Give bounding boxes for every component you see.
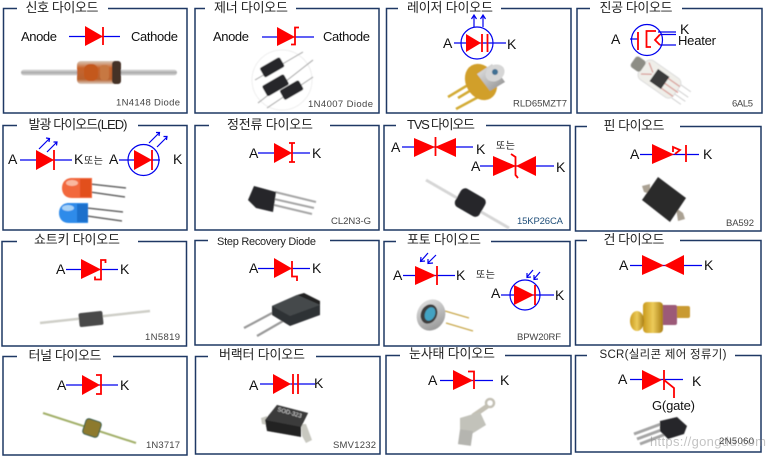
photo: TO-92 package: [248, 186, 316, 214]
heading: signal diode: 신호 다이오드: [26, 0, 99, 15]
photo: blue LED: [59, 203, 123, 223]
panel: TVS diode: [384, 117, 570, 230]
part number: 1N5819: [145, 332, 180, 343]
laser diode symbol: [454, 15, 506, 59]
panel: zener diode: [195, 0, 379, 113]
heading: LED: 발광 다이오드(LED): [28, 117, 128, 132]
photo: axial Schottky diode: [40, 311, 150, 327]
photo: SMD PIN diode: [642, 177, 686, 222]
heading: tunnel diode: 터널 다이오드: [28, 348, 102, 363]
heading: avalanche diode: 눈사태 다이오드: [409, 346, 495, 361]
current regulator symbol: [258, 143, 310, 163]
label: K: K: [556, 159, 566, 175]
label: K: K: [312, 260, 322, 276]
label: K: K: [500, 372, 510, 388]
label: K: K: [120, 261, 130, 277]
diode symbol: [69, 26, 120, 46]
vacuum tube symbol: [630, 24, 676, 56]
tunnel diode symbol: [66, 375, 118, 395]
part number: RLD65MZT7: [513, 98, 567, 110]
part number: 6AL5: [732, 98, 753, 110]
text: or: 또는: [84, 155, 103, 167]
panel: tunnel diode: [3, 348, 187, 455]
photo: stud-mount diode: [458, 399, 494, 446]
photodiode symbol in circle: [501, 270, 554, 310]
photo: axial TVS diode: [426, 180, 509, 228]
label: K: K: [173, 151, 183, 167]
photo: red LED: [62, 178, 126, 198]
label: A: A: [619, 257, 629, 273]
photo: SOD-323 package: SOD-323: [276, 407, 303, 420]
part number: CL2N3-G: [331, 216, 371, 227]
photo: laser diode can: [448, 58, 508, 109]
part number: 1N4148 Diode: [116, 98, 180, 108]
panel: PIN diode: [576, 118, 761, 231]
label: cathode: Cathode: [323, 29, 370, 44]
label: A: A: [56, 261, 66, 277]
label: A: A: [393, 267, 403, 283]
avalanche symbol: [440, 370, 493, 390]
part number: 2N5060: [719, 436, 754, 447]
part number: BA592: [726, 218, 754, 229]
photo: power package: [244, 293, 320, 336]
text: or: 또는: [476, 269, 495, 281]
label: A: A: [109, 151, 119, 167]
label: A: A: [249, 260, 259, 276]
label: K: K: [476, 141, 486, 157]
panel: signal diode: [4, 0, 187, 113]
heading: constant current diode: 정전류 다이오드: [227, 117, 313, 132]
label: A: A: [491, 285, 501, 301]
panel: step recovery diode: [195, 236, 379, 345]
bidirectional TVS symbol: [402, 137, 473, 157]
photo: vacuum tube: [627, 51, 694, 108]
SCR symbol: [630, 370, 683, 398]
label: anode: Anode: [213, 29, 249, 44]
label: A: A: [428, 372, 438, 388]
photo: SCR TO-92: [634, 417, 687, 444]
label: A: A: [391, 139, 401, 155]
part number: 15KP26CA: [517, 216, 564, 227]
label: A: A: [249, 145, 259, 161]
heading: zener diode: 제너 다이오드: [214, 0, 288, 15]
part number: SMV1232: [333, 440, 376, 451]
panel: Schottky diode: [2, 232, 186, 346]
label: A: A: [471, 158, 481, 174]
label: heater: Heater: [678, 33, 717, 48]
label: A: A: [8, 151, 18, 167]
heading: laser diode: 레이저 다이오드: [407, 0, 493, 15]
heading: varactor diode: 버랙터 다이오드: [219, 347, 305, 362]
label: K: K: [692, 373, 702, 389]
heading: TVS diode: TVS 다이오드: [407, 117, 475, 132]
heading: Schottky diode: 쇼트키 다이오드: [34, 232, 120, 247]
LED symbol: [20, 138, 72, 170]
part number: BPW20RF: [517, 332, 561, 343]
label: K: K: [314, 375, 324, 391]
photodiode symbol: [403, 253, 455, 285]
label: K: K: [312, 145, 322, 161]
panel: photo diode: [384, 232, 570, 346]
text: or: 또는: [496, 140, 515, 152]
photo: three axial diodes: [252, 50, 313, 110]
varactor symbol: [260, 374, 315, 394]
step recovery symbol: [258, 258, 310, 281]
photo: glass signal diode: [21, 61, 177, 84]
zener symbol: [262, 27, 314, 46]
photo: Gunn diode package: [630, 302, 690, 333]
panel: varactor diode: [196, 347, 380, 454]
heading: PIN diode: 핀 다이오드: [604, 118, 665, 133]
heading: vacuum diode: 진공 다이오드: [600, 0, 673, 15]
photo: tunnel diode: [43, 413, 136, 443]
label: anode: Anode: [21, 29, 57, 44]
heading: Gunn diode: 건 다이오드: [604, 232, 665, 247]
label: K: K: [555, 287, 565, 303]
photo: metal can photodiode: [412, 295, 473, 335]
panel: vacuum diode: [577, 0, 762, 113]
Gunn diode symbol: [630, 255, 702, 275]
label: K: K: [680, 21, 690, 37]
label: K: K: [507, 36, 517, 52]
heading: SCR: SCR(실리콘 제어 정류기): [600, 348, 727, 361]
alternative TVS symbol: [480, 154, 554, 178]
watermark: https://gongdu.com: [650, 434, 766, 449]
label: A: A: [618, 371, 628, 387]
panel: LED: [3, 117, 187, 230]
Schottky symbol: [66, 259, 118, 280]
label: K: K: [456, 267, 466, 283]
label: gate: G(gate): [652, 398, 695, 413]
label: K: K: [120, 377, 130, 393]
label: A: A: [249, 377, 259, 393]
label: A: A: [611, 31, 621, 47]
part number: 1N3717: [146, 440, 180, 451]
panel: SCR: [576, 348, 766, 452]
label: K: K: [74, 151, 84, 167]
LED symbol in circle: [119, 132, 167, 176]
label: K: K: [703, 146, 713, 162]
label: K: K: [704, 257, 714, 273]
panel: laser diode: [386, 0, 571, 113]
panel: avalanche diode: [386, 346, 571, 454]
photo: SOD-323 package: [261, 405, 312, 443]
PIN diode symbol: [640, 144, 699, 164]
heading: step recovery diode: Step Recovery Diode: [217, 236, 316, 248]
part number: 1N4007 Diode: [308, 99, 373, 110]
label: A: A: [443, 35, 453, 51]
panel: Gunn diode: [576, 232, 761, 345]
label: A: A: [630, 146, 640, 162]
panel: constant current diode: [195, 117, 379, 230]
label: cathode: Cathode: [131, 29, 178, 44]
heading: photo diode: 포토 다이오드: [407, 232, 481, 247]
label: A: A: [57, 377, 67, 393]
